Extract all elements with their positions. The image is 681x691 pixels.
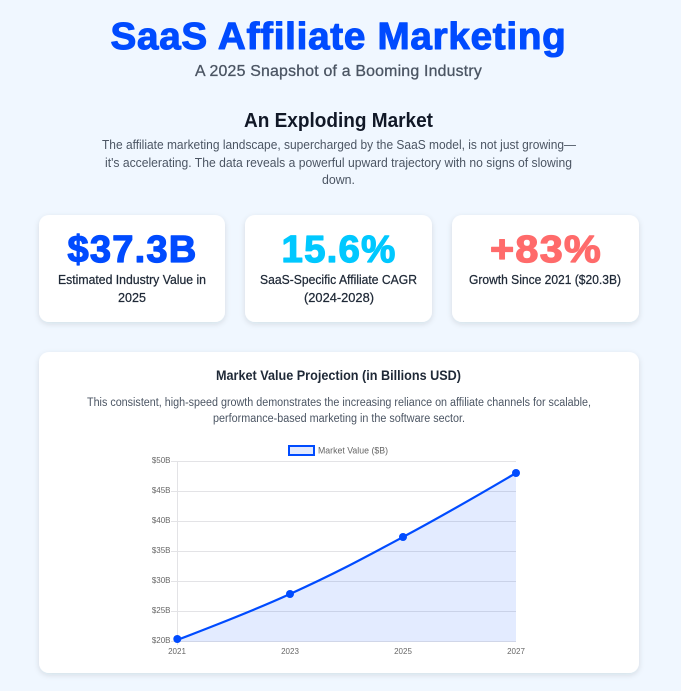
chart description: performance-based marketing in the software sector. [213, 413, 465, 425]
stat label: SaaS-Specific Affiliate CAGR [260, 272, 417, 287]
panel: growth stat [452, 215, 639, 322]
x axis labels: 2023 [281, 647, 299, 656]
line series [177, 473, 516, 640]
area fill [177, 473, 516, 642]
subtitle: A 2025 Snapshot of a Booming Industry [195, 63, 482, 80]
panel: industry value stat [39, 215, 225, 322]
legend: Market Value ($B) [318, 446, 388, 456]
chart title: Market Value Projection (in Billions USD) [216, 367, 461, 383]
stat label [58, 272, 206, 305]
section heading: An Exploding Market [244, 110, 433, 132]
title: SaaS Affiliate Marketing [110, 16, 566, 58]
y axis labels: $50B [152, 456, 170, 465]
intro text: down. [322, 172, 355, 187]
x axis labels: 2027 [507, 647, 525, 656]
y axis labels: $25B [152, 606, 170, 615]
chart description: This consistent, high-speed growth demonstrates the increasing reliance on affiliate channels for scalable, [87, 397, 591, 409]
intro text [102, 137, 576, 187]
intro text: it's accelerating. The data reveals a powerful upward trajectory with no signs of slowing [105, 155, 572, 170]
stat label: Estimated Industry Value in [58, 272, 206, 287]
panel: CAGR stat [245, 215, 432, 322]
stat value: 15.6% [282, 229, 396, 271]
stat label: Growth Since 2021 ($20.3B) [469, 272, 621, 287]
panel: market value projection [39, 352, 639, 673]
stat value: +83% [490, 229, 602, 271]
x axis labels: 2021 [168, 647, 186, 656]
stat label [260, 272, 417, 305]
intro text: The affiliate marketing landscape, supercharged by the SaaS model, is not just growing— [102, 137, 576, 152]
y axis labels: $45B [152, 486, 170, 495]
stat label: (2024-2028) [304, 290, 374, 305]
y axis labels: $30B [152, 576, 170, 585]
y axis labels: $35B [152, 546, 170, 555]
y axis labels [152, 456, 170, 645]
y axis labels: $40B [152, 516, 170, 525]
line chart [152, 446, 525, 656]
x axis labels: 2025 [394, 647, 412, 656]
stat value: $37.3B [68, 229, 198, 271]
chart description [87, 397, 591, 425]
x axis labels [168, 647, 525, 656]
data points [173, 469, 520, 643]
stat label: 2025 [118, 290, 146, 305]
y axis labels: $20B [152, 636, 170, 645]
legend [289, 446, 388, 456]
